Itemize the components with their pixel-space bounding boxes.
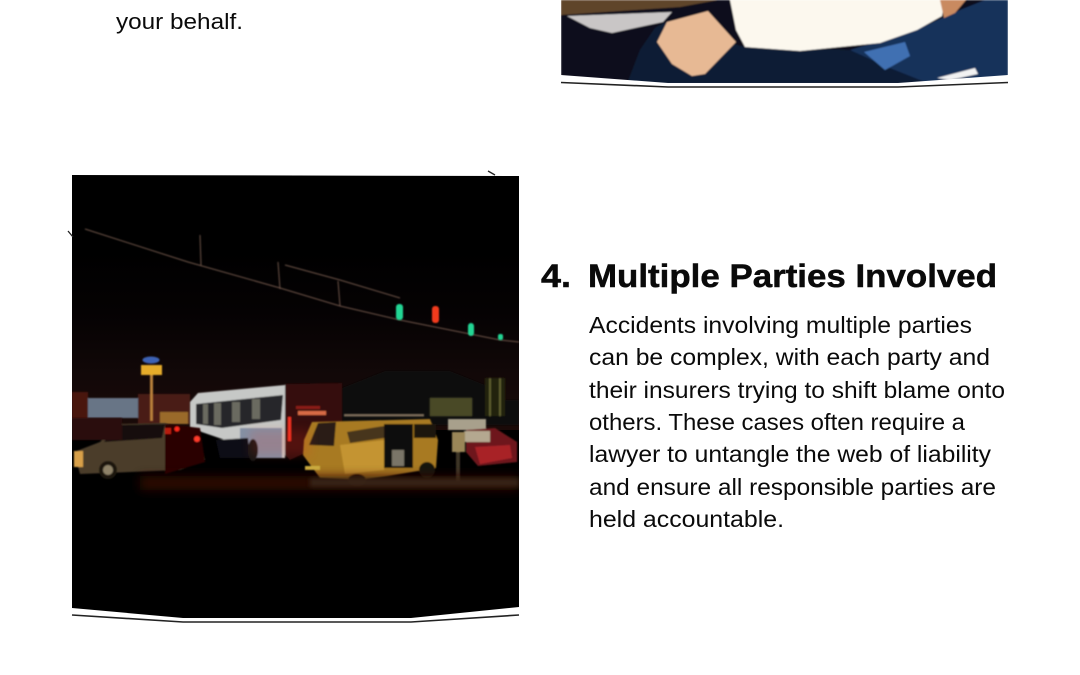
text block: explanation: Accidents involving multiple parties (589, 312, 972, 338)
text block: explanation: lawyer to untangle the web of liability (589, 441, 992, 467)
text block: end of previous paragraph: your behalf. (116, 9, 243, 34)
text block: explanation (589, 312, 1005, 532)
decorative curve line under top photo (561, 82, 1008, 87)
decorative curve line under main photo (72, 615, 519, 622)
background buildings (72, 371, 519, 425)
yellow minibus (303, 414, 438, 486)
road glow (140, 476, 519, 490)
traffic lights (396, 304, 503, 340)
heading: 4. Multiple Parties Involved: Multiple Parties Involved (588, 258, 997, 294)
heading: 4. Multiple Parties Involved: 4. (541, 258, 571, 294)
cars on the left (72, 418, 205, 479)
text block: explanation: their insurers trying to shift blame onto (589, 377, 1005, 403)
Ford sign (141, 356, 162, 421)
bus (190, 383, 342, 461)
sky glow (72, 328, 519, 430)
text block: explanation: can be complex, with each party and (589, 344, 990, 370)
text block: explanation: held accountable. (589, 506, 784, 532)
photo: night traffic at a junction (72, 175, 520, 619)
photo: person's hand on lap, cropped (561, 0, 1008, 84)
overhead gantry and wires (85, 229, 519, 342)
text block: explanation: others. These cases often require a (589, 409, 965, 435)
pedestrian and car on the right (448, 419, 517, 481)
small corner tick marks (68, 171, 495, 237)
text block: explanation: and ensure all responsible parties are (589, 474, 996, 500)
